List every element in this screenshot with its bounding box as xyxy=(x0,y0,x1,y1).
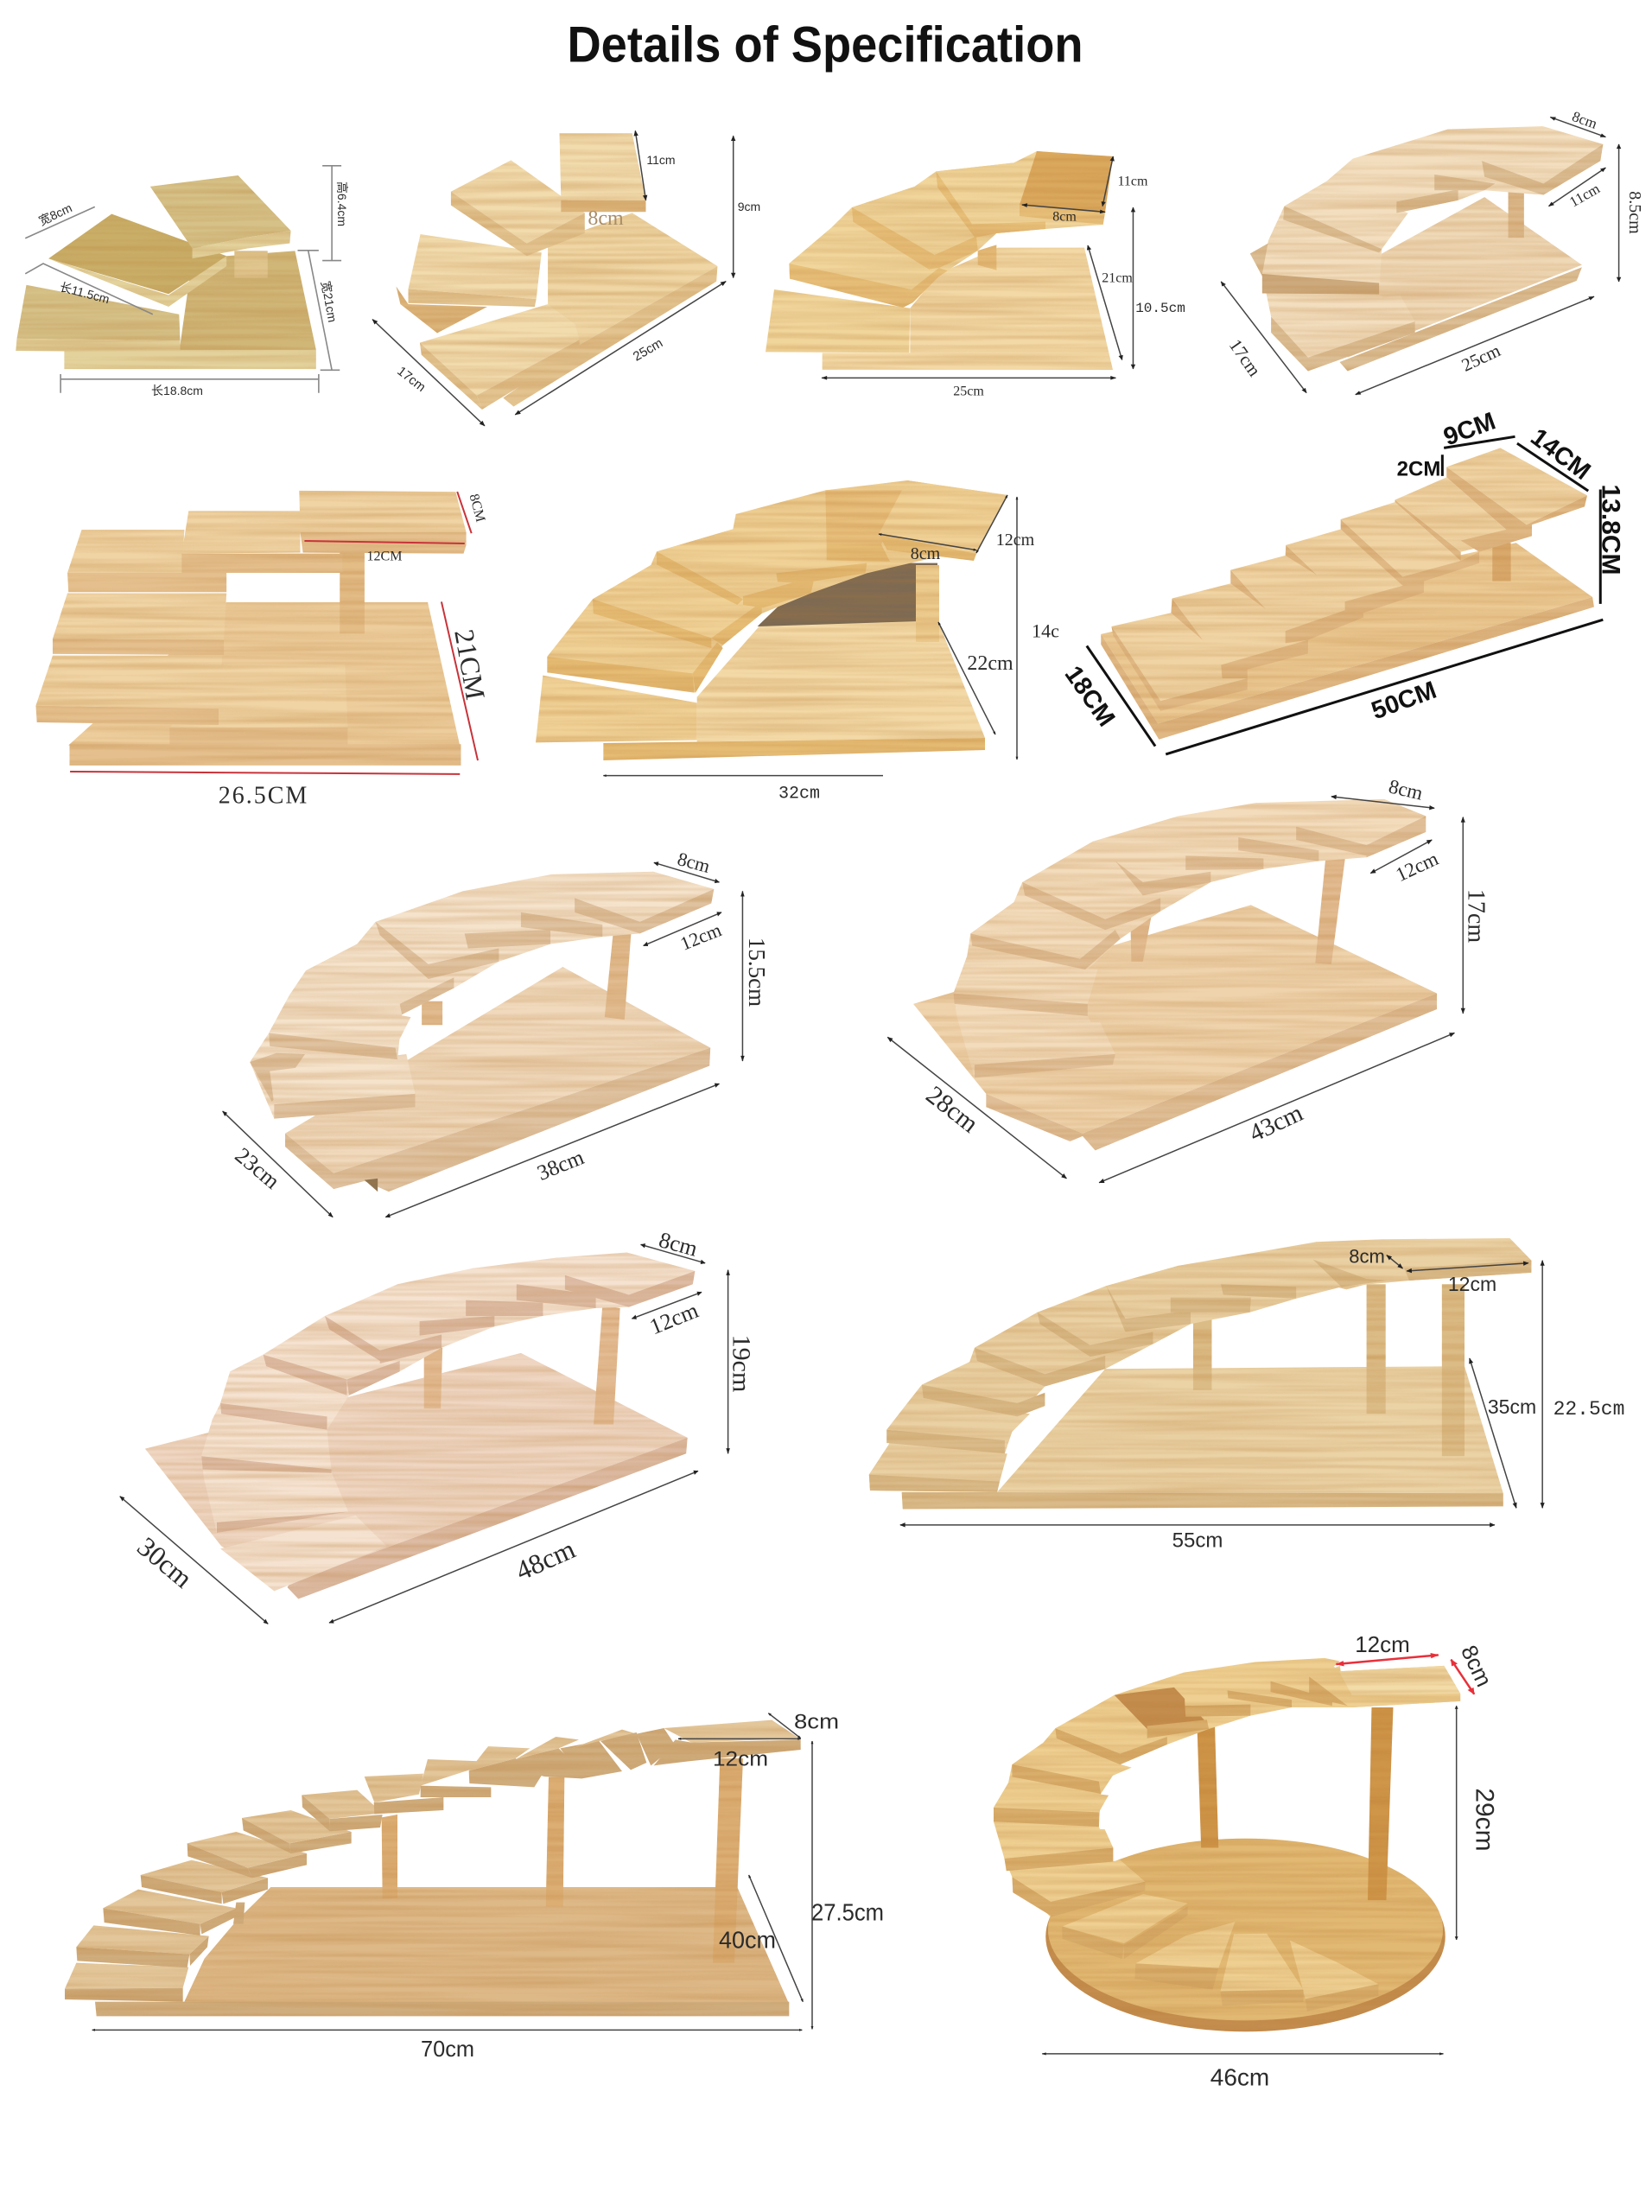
stair steps xyxy=(869,1238,1531,1492)
post xyxy=(916,565,939,642)
dimension labels xyxy=(421,1711,884,2062)
base board xyxy=(1101,543,1594,740)
panel: model 11, 55cm stand xyxy=(869,1238,1624,1552)
stair steps xyxy=(766,151,1113,353)
label: 29cm: 29cm xyxy=(1471,1788,1498,1852)
panel: model 2, 4-step stand xyxy=(372,130,760,426)
label: 18CM: 18CM xyxy=(1059,661,1120,732)
stair steps xyxy=(201,1253,695,1591)
dimension lines xyxy=(822,156,1133,378)
base board xyxy=(95,1887,789,2016)
base board xyxy=(1339,197,1582,371)
post xyxy=(340,553,365,633)
product: 38cm curved stand xyxy=(250,872,714,1192)
base board xyxy=(603,620,985,760)
product: 7-step straight stand xyxy=(1101,448,1594,740)
label: 2CM: 2CM xyxy=(1397,458,1440,480)
posts xyxy=(1193,1284,1465,1456)
label: 15.5cm: 15.5cm xyxy=(744,938,770,1007)
label: 22cm: 22cm xyxy=(967,652,1013,675)
base board xyxy=(68,602,461,766)
label: 12cm: 12cm xyxy=(646,1298,702,1339)
label: height 6.4cm: 高6.4cm xyxy=(335,181,349,226)
dimension labels xyxy=(219,493,492,809)
post xyxy=(234,251,268,278)
dimension lines xyxy=(92,1713,812,2030)
dimension labels xyxy=(231,848,770,1194)
product: round base stand xyxy=(994,1658,1460,2031)
dimension labels xyxy=(131,1227,755,1594)
posts xyxy=(1198,1707,1393,1900)
label: 48cm: 48cm xyxy=(511,1533,580,1586)
dimension labels xyxy=(1225,108,1644,380)
label: 8cm: 8cm xyxy=(1387,775,1425,804)
posts xyxy=(233,1758,743,1963)
label: 38cm: 38cm xyxy=(534,1146,588,1185)
product: 4-step stand xyxy=(396,133,717,410)
base board xyxy=(902,1366,1503,1509)
dimension labels xyxy=(921,775,1490,1147)
panel: model 5, 5-step stand with red lines xyxy=(35,491,492,809)
label: 32cm: 32cm xyxy=(778,785,820,804)
label: 8cm: 8cm xyxy=(911,544,941,563)
product: pale 6-step stand xyxy=(1250,126,1603,371)
dimension labels xyxy=(36,181,349,397)
dark arch interior xyxy=(758,563,937,626)
dimension lines xyxy=(900,1255,1542,1525)
dimension labels xyxy=(778,531,1059,804)
label: width 8cm: 宽8cm xyxy=(36,200,74,228)
label: width 21cm: 宽21cm xyxy=(319,280,340,323)
label: 27.5cm: 27.5cm xyxy=(811,1899,884,1925)
label: 12cm: 12cm xyxy=(996,531,1035,550)
label: 8cm: 8cm xyxy=(1349,1246,1385,1267)
stair steps xyxy=(250,872,714,1119)
label: 17cm: 17cm xyxy=(1462,889,1490,943)
panel: model 1, 3-step olive stand xyxy=(16,166,349,397)
stair steps xyxy=(65,1720,801,2002)
label: 28cm: 28cm xyxy=(921,1080,983,1139)
label: 8cm: 8cm xyxy=(794,1711,839,1733)
dimension lines xyxy=(887,797,1463,1183)
label: length 11.5cm: 长11.5cm xyxy=(58,280,111,306)
base board xyxy=(913,905,1437,1150)
dimension lines xyxy=(223,862,742,1217)
panel: model 10, 48cm curved stand xyxy=(120,1227,756,1624)
label: 12cm: 12cm xyxy=(1393,848,1442,886)
label: 8cm: 8cm xyxy=(1052,209,1077,225)
stair steps xyxy=(954,799,1426,1078)
dimension labels xyxy=(394,153,760,395)
dimension lines xyxy=(603,495,1017,776)
panel: model 9, 43cm curved stand xyxy=(887,775,1490,1183)
label: 25cm: 25cm xyxy=(631,335,665,365)
label: 21CM: 21CM xyxy=(448,627,492,702)
dimension lines xyxy=(120,1244,728,1624)
dimension lines xyxy=(1221,118,1619,395)
label: 70cm: 70cm xyxy=(421,2036,474,2062)
label: 9cm: 9cm xyxy=(738,200,760,213)
panel: model 12, 70cm stand xyxy=(65,1711,884,2062)
product: 55cm stand xyxy=(869,1238,1531,1509)
base board xyxy=(823,248,1113,370)
dimension lines xyxy=(1042,1655,1474,2054)
post xyxy=(1492,543,1511,582)
panel: model 6, arched fan stand xyxy=(536,480,1059,804)
label: 35cm: 35cm xyxy=(1488,1395,1536,1418)
panel: model 3, golden fan stand xyxy=(766,151,1185,399)
label: 11cm: 11cm xyxy=(646,153,676,167)
label: 8cm: 8cm xyxy=(657,1227,700,1262)
red dimension lines xyxy=(70,492,478,774)
label: 14c: 14c xyxy=(1032,620,1059,641)
panel: model 7, 7-step straight stand xyxy=(1059,407,1624,754)
product: 43cm curved stand xyxy=(913,799,1437,1150)
product: golden fan stand xyxy=(766,151,1113,370)
panel: model 13, round base stand xyxy=(994,1631,1498,2091)
product: arched fan stand xyxy=(536,480,1007,760)
posts xyxy=(424,1306,620,1425)
label: 9CM: 9CM xyxy=(1440,407,1499,452)
stair steps xyxy=(1111,448,1587,711)
dimension labels xyxy=(953,175,1185,399)
dimension lines xyxy=(372,130,734,426)
label: 12cm: 12cm xyxy=(1355,1631,1410,1657)
stair steps xyxy=(35,491,467,745)
label: length 18.8cm: 长18.8cm xyxy=(151,384,203,397)
post xyxy=(1509,188,1524,238)
label: 10.5cm: 10.5cm xyxy=(1135,301,1185,316)
round base xyxy=(1045,1839,1446,2031)
label: 46cm: 46cm xyxy=(1210,2063,1269,2091)
panel: model 8, 38cm curved stand xyxy=(223,848,770,1217)
product: 3-step stand xyxy=(16,175,316,369)
base board xyxy=(285,967,710,1192)
label: 12cm: 12cm xyxy=(1448,1273,1496,1295)
label: 23cm: 23cm xyxy=(231,1142,284,1194)
label: 50CM: 50CM xyxy=(1368,677,1440,725)
label: 25cm: 25cm xyxy=(953,384,984,399)
label: 8.5cm: 8.5cm xyxy=(1625,191,1644,234)
label: 21cm: 21cm xyxy=(1102,271,1133,285)
label: 26.5CM: 26.5CM xyxy=(219,783,308,809)
title: Details of Specification xyxy=(567,17,1083,73)
product: 48cm curved stand xyxy=(145,1253,695,1599)
label: 30cm: 30cm xyxy=(131,1530,199,1594)
label: 13.8CM: 13.8CM xyxy=(1597,484,1624,575)
dimension labels xyxy=(1172,1246,1624,1552)
stair steps xyxy=(1250,126,1603,371)
posts xyxy=(1130,850,1345,964)
dimension lines xyxy=(1087,436,1603,754)
stair steps xyxy=(396,133,645,410)
product: 70cm stand xyxy=(65,1720,801,2016)
base board xyxy=(64,251,316,369)
label: 8cm: 8cm xyxy=(588,207,624,230)
base board xyxy=(145,1353,688,1599)
label: 19cm: 19cm xyxy=(728,1335,755,1392)
label: 25cm: 25cm xyxy=(1458,340,1503,376)
dimension labels xyxy=(1210,1631,1498,2091)
stair steps xyxy=(994,1658,1460,2012)
label: 11cm: 11cm xyxy=(1118,175,1148,188)
posts xyxy=(422,930,631,1025)
dimension labels xyxy=(1059,407,1624,732)
label: 40cm: 40cm xyxy=(719,1927,776,1953)
post xyxy=(978,245,996,270)
dimension lines xyxy=(25,166,341,393)
label: 22.5cm: 22.5cm xyxy=(1554,1398,1624,1421)
label: 43cm: 43cm xyxy=(1245,1099,1307,1147)
label: 8cm: 8cm xyxy=(1456,1641,1497,1691)
label: 12CM: 12CM xyxy=(367,550,402,563)
label: 8cm: 8cm xyxy=(1570,108,1599,132)
label: 8CM: 8CM xyxy=(467,493,487,524)
label: 17cm: 17cm xyxy=(1225,335,1265,380)
panel: model 4, pale 6-step stand xyxy=(1221,108,1644,395)
product: 5-step stand xyxy=(35,491,467,766)
label: 12cm: 12cm xyxy=(677,918,724,955)
stair steps xyxy=(536,480,1007,742)
label: 14CM: 14CM xyxy=(1525,423,1596,486)
label: 17cm: 17cm xyxy=(394,364,429,395)
stair steps xyxy=(16,175,291,353)
label: 8cm: 8cm xyxy=(675,848,713,877)
label: 12cm: 12cm xyxy=(713,1747,768,1771)
label: 11cm: 11cm xyxy=(1566,180,1603,211)
base board xyxy=(503,213,717,407)
label: 55cm: 55cm xyxy=(1172,1529,1223,1552)
